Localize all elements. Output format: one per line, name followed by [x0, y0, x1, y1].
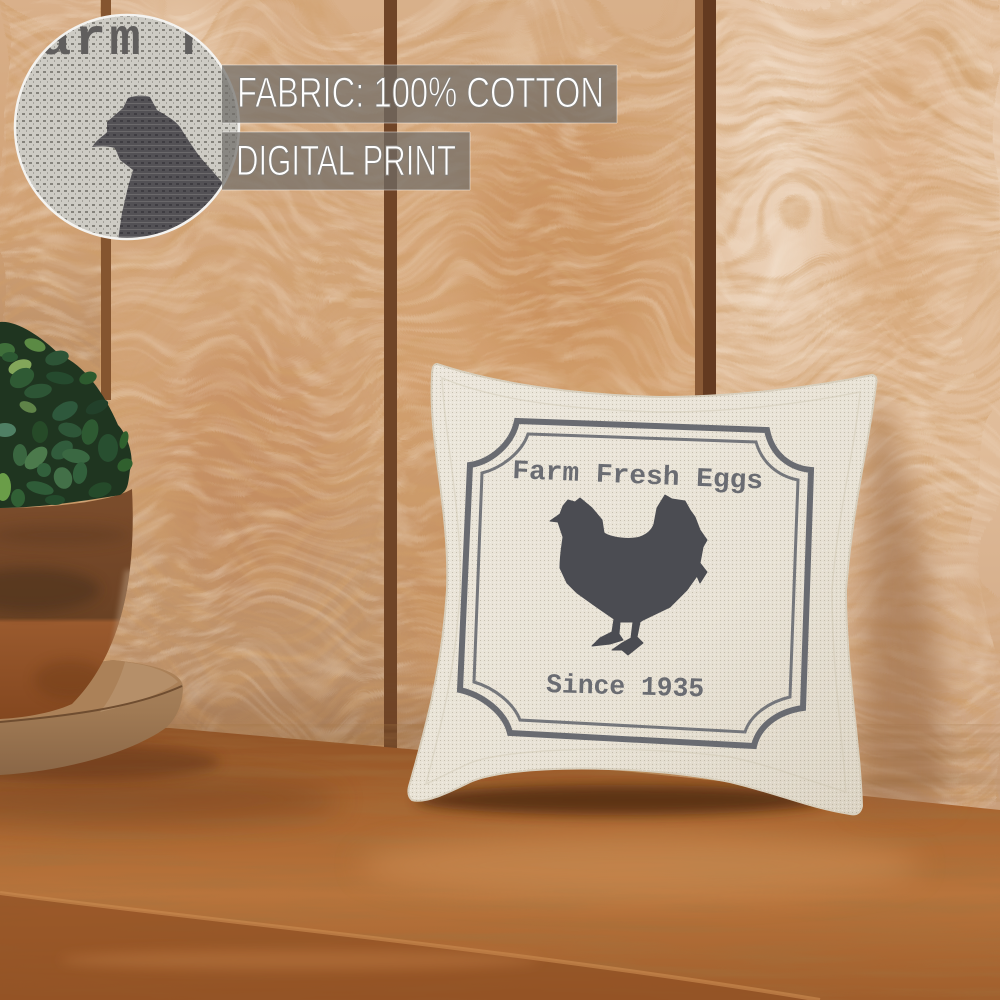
icon: hen silhouette — [550, 495, 707, 655]
label: fabric — [222, 65, 617, 123]
print border outer — [460, 421, 811, 746]
text: Since 1935: Since 1935 — [546, 671, 705, 705]
label: print — [222, 132, 470, 190]
pillow seam shading — [426, 378, 860, 792]
wooden shelf — [0, 724, 1000, 1000]
pillow shadow on shelf — [415, 785, 825, 815]
print border inner — [474, 434, 798, 732]
icon: wooden bowl — [0, 489, 134, 719]
plank gaps — [101, 0, 111, 400]
lens text: partial print: arm r — [40, 11, 210, 70]
pillow — [408, 364, 876, 814]
wall darkening above shelf — [166, 696, 430, 750]
icon: green plant — [0, 322, 135, 508]
label: print: DIGITAL PRINT — [236, 137, 456, 185]
pillow cast shadow on wall — [858, 385, 945, 808]
pillow weave texture — [408, 364, 876, 814]
lens icon: hen detail — [92, 96, 230, 240]
callout: fabric zoom lens — [15, 11, 239, 240]
plate — [0, 660, 220, 780]
lens background — [15, 15, 239, 239]
heading: Farm Fresh Eggs: Farm Fresh Eggs — [512, 457, 764, 498]
pillow body — [408, 364, 876, 814]
tonal blotches — [162, 342, 334, 586]
label: fabric: FABRIC: 100% COTTON — [237, 69, 604, 117]
